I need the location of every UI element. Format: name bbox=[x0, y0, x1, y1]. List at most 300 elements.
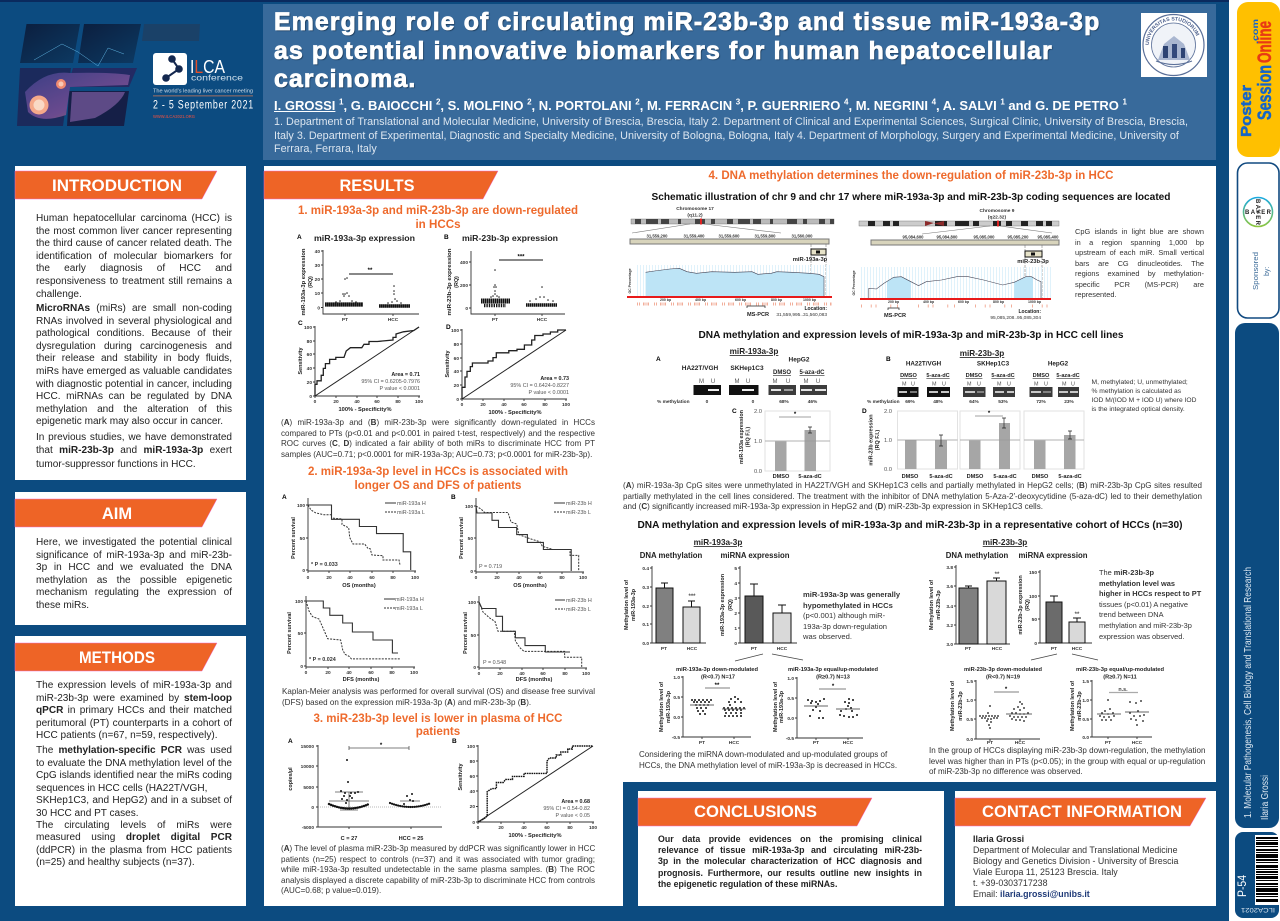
chart: plasma ROC curve: Area = 0.68 bbox=[561, 799, 590, 805]
affiliations bbox=[274, 116, 1188, 155]
chart: miR-193a-3p expression dot plot: 10 bbox=[315, 291, 320, 297]
diagram: chromosome 9 with miR-23b-3p: miR-23b-3p bbox=[1017, 259, 1049, 265]
text: methods paragraph 1: The expression levels of miR-193a-3p and bbox=[36, 680, 232, 691]
text: introduction paragraph 1: the third cause of cancer related death. The bbox=[36, 238, 232, 249]
chart: Kaplan-Meier OS miR-193a bbox=[282, 494, 426, 589]
gels: miR-23b-3p cell lines: 23% bbox=[1064, 399, 1075, 405]
chart: Kaplan-Meier OS miR-23b: Percent survival bbox=[459, 517, 465, 559]
diagram: chromosome 17 with miR-193a-3p: 600 bp bbox=[735, 298, 746, 302]
chart: miR-193a expression in HepG2: C bbox=[732, 408, 737, 415]
chart: miR-23b expression in three cell lines: 1.0 bbox=[884, 438, 892, 444]
chart: Kaplan-Meier OS miR-193a: 0 bbox=[302, 568, 305, 574]
gels: miR-23b-3p cell lines: 72% bbox=[1036, 399, 1047, 405]
text: aim: these miRs. bbox=[36, 600, 89, 611]
gels: miR-23b-3p cell lines: 64% bbox=[969, 399, 980, 405]
chart: plasma ROC curve: 60 bbox=[470, 774, 475, 780]
chart: miR-23b-3p down-modulated scatter: miR-23b-3p down-modulated bbox=[964, 667, 1043, 673]
text: conclusions: the epigenetic regulation of these miRNAs. bbox=[658, 879, 837, 889]
caption: result 2: (DFS) based on the expression miR-193a-3p (A) and miR-23b-3p (B). bbox=[282, 698, 531, 706]
chart: miR-193a-3p expression dot plot: 20 bbox=[315, 277, 320, 283]
caption: result 1 bbox=[281, 418, 595, 458]
heading: result 1: 1. miR-193a-3p and miR-23b-3p are down-regulated bbox=[298, 204, 578, 217]
chart: miR-23b expression in three cell lines: 5-aza-dC bbox=[929, 474, 953, 480]
chart: miR-193a expression in HepG2: miR-193a expression bbox=[739, 410, 745, 464]
text: introduction paragraph 1: challenge. bbox=[36, 289, 82, 300]
diagram: chromosome 17 with miR-193a-3p: Chromosome 17 bbox=[676, 206, 714, 212]
title: as potential innovative biomarkers for human hepatocellular bbox=[274, 38, 1053, 65]
chart: miR-193a-3p DNA methylation bars: DNA methylation bbox=[640, 551, 702, 560]
chart: Kaplan-Meier DFS miR-23b: 40 bbox=[519, 671, 525, 677]
chart: Kaplan-Meier OS miR-193a: OS (months) bbox=[342, 583, 376, 589]
icon: university seal bbox=[1141, 13, 1207, 77]
caption: cell lines: and (C) significantly increased miR-193a-3p expression in HepG2 and (D) miR-23b-3p expression in SKHep1C3 cells. bbox=[623, 502, 1043, 511]
chart: ROC curve miR-23b-3p: 0 bbox=[456, 397, 459, 403]
chart: plasma ROC curve: 20 bbox=[498, 825, 504, 831]
text: aim: mechanism regulating the expression of bbox=[36, 587, 232, 598]
panel: poster number and barcode bbox=[1235, 832, 1279, 918]
chart: ROC curve miR-193a-3p: 0 bbox=[309, 394, 312, 400]
text: introduction paragraph 2: their release and stability in body fluids, bbox=[36, 353, 232, 364]
heading ribbon: conclusions: CONCLUSIONS bbox=[694, 803, 817, 821]
chart: miR-193a-3p miRNA expression bars: miR-193a-3p expression bbox=[720, 574, 726, 636]
text: CpG islands note: regions examined by methylation- bbox=[1075, 269, 1204, 278]
caption: miR-23b-3p cohort: In the group of HCCs displaying miR-23b-3p down-regulation, the methylation bbox=[929, 746, 1205, 755]
sponsor box: Bayer: by: bbox=[1264, 267, 1271, 276]
text: methods paragraph 1: peritumoral (PT) counterparts in a cohort of bbox=[36, 718, 232, 729]
title: Emerging role of circulating miR-23b-3p and tissue miR-193a-3p bbox=[274, 9, 1100, 36]
chart: ROC curve miR-23b-3p: 100 bbox=[562, 402, 570, 408]
text: conclusions: 3p in the molecular characterization of HCC diagnosis and bbox=[658, 856, 922, 866]
chart: ROC curve miR-193a-3p bbox=[298, 320, 423, 413]
chart: Kaplan-Meier DFS miR-23b: 0 bbox=[473, 665, 476, 671]
gels: miR-23b-3p cell lines: U bbox=[1071, 382, 1075, 388]
text: introduction paragraph 3: that miR-23b-3p and miR-193a-3p exert bbox=[36, 445, 232, 456]
text: introduction paragraph 2: HCC. miRNAs can be regulated by DNA bbox=[36, 391, 232, 402]
caption: miR-23b-3p cohort: level was higher than in PTs (p<0.05); in the group with equal or up-regulation bbox=[929, 757, 1205, 766]
caption: miR-193a-3p cohort: HCCs, the DNA methylation level of miR-193a-3p is decreased in HCCs. bbox=[639, 761, 897, 770]
chart: miR-23b-3p miRNA expression bars: 50 bbox=[1032, 617, 1037, 623]
chart: Kaplan-Meier OS miR-193a: miR-193a L bbox=[397, 510, 425, 516]
chart: miR-23b-3p miRNA expression bars bbox=[1018, 551, 1098, 660]
chart: miR-23b-3p miRNA expression bars: 0 bbox=[1034, 641, 1037, 647]
chart: miR-193a-3p DNA methylation bars: 0.1 bbox=[642, 622, 649, 628]
conference logo: ILCA: WWW.ILCA2021.ORG bbox=[153, 114, 195, 119]
gels: miR-193a-3p cell lines: U bbox=[746, 379, 750, 385]
chart: miR-23b-3p DNA methylation bars: 3.6 bbox=[946, 584, 953, 590]
chart: ROC curve miR-23b-3p: Sensitivity bbox=[445, 351, 451, 377]
chart: miR-23b-3p equal/up-modulated scatter: PT bbox=[1105, 740, 1111, 746]
conference logo: ILCA: The world's leading liver cancer meeting bbox=[153, 88, 253, 94]
text: miR-23b-3p note: methylation and miR-23b-3p bbox=[1099, 621, 1192, 630]
panel: results bbox=[264, 166, 623, 906]
chart: ROC curve miR-193a-3p: 60 bbox=[307, 352, 312, 358]
chart: miR-23b-3p equal/up-modulated scatter: 1.0 bbox=[1082, 698, 1089, 704]
panel: poster number and barcode: P-54 bbox=[1235, 875, 1249, 897]
gels: miR-193a-3p cell lines: U bbox=[786, 379, 790, 385]
gels: miR-23b-3p cell lines: M bbox=[967, 382, 972, 388]
chart: miR-193a-3p miRNA expression bars: miRNA expression bbox=[720, 551, 790, 560]
text: introduction paragraph 1: the most common liver cancer representing bbox=[36, 226, 232, 237]
chart: Kaplan-Meier DFS miR-23b: DFS (months) bbox=[516, 677, 552, 683]
heading: result 3 bbox=[314, 712, 563, 738]
text: miR-23b-3p note: The miR-23b-3p bbox=[1099, 568, 1154, 577]
gels: miR-193a-3p cell lines: U bbox=[711, 379, 715, 385]
text: introduction paragraph 2: with diagnostic potential in cancer, including bbox=[36, 379, 232, 390]
chart: miR-193a-3p DNA methylation bars: Methylation level of bbox=[624, 580, 630, 630]
caption: result 1: ROC curves (C, D) indicated a fair ability of both miRs to discriminate HCC from PT bbox=[281, 439, 595, 448]
sponsor box: Bayer: BAYER bbox=[1254, 199, 1260, 226]
text: introduction paragraph 2: RNAs involved in several physiological and bbox=[36, 316, 232, 327]
chart: Kaplan-Meier DFS miR-23b: 100 bbox=[582, 671, 590, 677]
gels: miR-23b-3p cell lines bbox=[867, 349, 1080, 405]
text: introduction paragraph 3 bbox=[36, 432, 232, 470]
chart: Kaplan-Meier DFS miR-193a: 100 bbox=[410, 670, 418, 676]
caption: result 3: patients (n=25) respect to controls (n=37) and it was associated with tumor grading; bbox=[281, 854, 595, 864]
text: miR-23b-3p note: methylation level was bbox=[1099, 579, 1175, 588]
chart: ROC curve miR-193a-3p: 60 bbox=[374, 399, 380, 405]
caption: result 1: (A) miR-193a-3p and (B) miR-23b-3p were significantly down-regulated in HCCs bbox=[281, 418, 595, 427]
gels: miR-193a-3p cell lines: 68% bbox=[779, 399, 790, 405]
chart: Kaplan-Meier DFS miR-193a: * P = 0.024 bbox=[309, 657, 336, 663]
chart: ROC curve miR-23b-3p: Area = 0.73 bbox=[540, 376, 569, 382]
chart: miR-23b-3p equal/up-modulated scatter: miR-23b-3p bbox=[1077, 691, 1083, 721]
chart: Kaplan-Meier OS miR-23b: 50 bbox=[468, 536, 473, 542]
panel: title header bbox=[263, 4, 1216, 160]
heading: result 2: longer OS and DFS of patients bbox=[354, 479, 522, 492]
text: methods paragraph 3: measured using droplet digital PCR bbox=[36, 832, 232, 843]
chart: ROC curve miR-193a-3p: 20 bbox=[307, 380, 312, 386]
text: introduction paragraph 2: dysregulation during carcinogenesis and bbox=[36, 341, 232, 352]
chart: miR-193a-3p miRNA expression bars: 5 bbox=[734, 566, 737, 572]
chart: plasma ROC curve: 100 bbox=[589, 825, 597, 831]
chart: miR-23b-3p expression dot plot: miR-23b-3p expression bbox=[462, 233, 558, 243]
text: contact details: Ilaria Grossi bbox=[973, 834, 1024, 844]
chart: Kaplan-Meier OS miR-23b: 100 bbox=[579, 575, 587, 581]
diagram: chromosome 9 with miR-23b-3p: 95,085,000 bbox=[974, 234, 995, 240]
chart: miR-23b expression in three cell lines bbox=[862, 408, 1084, 480]
chart: ROC curve miR-193a-3p: 20 bbox=[333, 399, 339, 405]
gels: miR-23b-3p cell lines: M bbox=[1034, 382, 1039, 388]
gels: miR-193a-3p cell lines: miR-193a-3p bbox=[730, 347, 778, 356]
text: CpG islands note: bars are CG dinucleotides. The bbox=[1075, 258, 1204, 268]
chart: miR-193a-3p equal/up-modulated scatter: -0.5 bbox=[786, 736, 794, 742]
title bbox=[274, 9, 1100, 93]
chart: Kaplan-Meier DFS miR-193a: miR-193a H bbox=[395, 597, 424, 603]
text: gel legend: M, methylated; U, unmethylated; bbox=[1092, 379, 1188, 386]
subheading: representative cohort: DNA methylation and expression levels of miR-193a-3p and miR-23b-3p in a representative cohort of HCCs (n=30) bbox=[638, 520, 1182, 531]
badge: PosterSessionOnline bbox=[1237, 2, 1280, 157]
text: methods paragraph 2: sequences in HCC cells (HA22T/VGH, bbox=[36, 783, 207, 794]
gels: miR-193a-3p cell lines: SKHep1C3 bbox=[730, 365, 764, 372]
text: miR-193a-3p note: miR-193a-3p was generally bbox=[803, 590, 900, 599]
caption: result 3: (AUC=0.68; p value=0.019). bbox=[281, 886, 381, 895]
gels: miR-23b-3p cell lines: U bbox=[942, 382, 946, 388]
chart: miR-193a expression in HepG2: DMSO bbox=[773, 474, 790, 480]
chart: Kaplan-Meier OS miR-23b: miR-23b H bbox=[566, 501, 592, 507]
diagram: chromosome 9 with miR-23b-3p: 95,084,800 bbox=[937, 234, 958, 240]
affiliations: Ferrara, Ferrara, Italy bbox=[274, 143, 377, 155]
chart: miR-23b-3p miRNA expression bars: miRNA expression bbox=[1018, 551, 1088, 560]
text: miR-23b-3p note: expression was observed. bbox=[1099, 632, 1184, 641]
gels: miR-23b-3p cell lines: M bbox=[902, 382, 907, 388]
gels: miR-193a-3p cell lines: M bbox=[699, 379, 704, 385]
chart: miR-23b-3p equal/up-modulated scatter: 0.5 bbox=[1082, 717, 1089, 723]
diagram: chromosome 17 with miR-193a-3p: 31,559,200 bbox=[647, 234, 668, 238]
chart: miR-193a expression in HepG2: 2.0 bbox=[754, 409, 762, 415]
caption: result 3 bbox=[281, 844, 595, 895]
chart: Kaplan-Meier OS miR-193a: * P = 0.033 bbox=[311, 562, 338, 568]
chart: miR-23b-3p miRNA expression bars: HCC bbox=[1072, 646, 1083, 652]
heading: result 2 bbox=[308, 465, 568, 492]
text: conclusions: prognosis. Furthermore, our results outline new insights in bbox=[658, 868, 922, 878]
chart: Kaplan-Meier OS miR-23b: 0 bbox=[475, 575, 478, 581]
chart: miR-23b-3p DNA methylation bars: HCC bbox=[992, 646, 1003, 652]
diagram: chromosome 17 with miR-193a-3p: 31,559,995..31,560,083 bbox=[776, 312, 827, 318]
chart: Kaplan-Meier OS miR-23b: 60 bbox=[537, 575, 543, 581]
chart: miR-193a-3p DNA methylation bars: *** bbox=[688, 594, 696, 600]
chart: plasma ROC curve: 40 bbox=[470, 789, 475, 795]
chart: Kaplan-Meier OS miR-23b: 80 bbox=[559, 575, 565, 581]
chart: miR-193a-3p equal/up-modulated scatter: PT bbox=[813, 740, 819, 746]
text: introduction paragraph 1: responsiveness to treatment still remains a bbox=[36, 276, 232, 287]
text: introduction paragraph 1: identification of molecular biomarkers for bbox=[36, 251, 232, 262]
text: contact details: t. +39-0303717238 bbox=[973, 878, 1048, 888]
panel: topic and presenter: Ilaria Grossi bbox=[1259, 775, 1271, 820]
chart: miR-23b expression in three cell lines: D bbox=[862, 408, 867, 415]
diagram: chromosome 17 with miR-193a-3p: 31,559,800 bbox=[755, 234, 776, 238]
chart: plasma ROC curve: 80 bbox=[567, 825, 573, 831]
chart: miR-193a-3p miRNA expression bars: 0 bbox=[734, 641, 737, 647]
chart: plasma miR-23b-3p copies dot plot: 5000 bbox=[303, 785, 314, 791]
chart: Kaplan-Meier DFS miR-23b: 20 bbox=[497, 671, 503, 677]
diagram: chromosome 17 with miR-193a-3p: (q11.2) bbox=[687, 212, 703, 218]
chart: ROC curve miR-23b-3p: 40 bbox=[501, 402, 507, 408]
chart: Kaplan-Meier DFS miR-23b: miR-23b H bbox=[566, 598, 592, 604]
chart: miR-23b expression in three cell lines: 0.0 bbox=[884, 467, 892, 473]
caption: miR-23b-3p cohort bbox=[929, 746, 1205, 776]
chart: Kaplan-Meier DFS miR-193a bbox=[287, 596, 424, 683]
chart: miR-193a-3p DNA methylation bars: HCC bbox=[687, 646, 698, 652]
chart: miR-23b-3p down-modulated scatter: miR-23b-3p bbox=[958, 691, 964, 721]
diagram: chromosome 17 with miR-193a-3p: miR-193a-3p bbox=[793, 257, 828, 263]
chart: Kaplan-Meier OS miR-193a: 20 bbox=[326, 575, 332, 581]
chart: miR-23b-3p down-modulated scatter bbox=[950, 667, 1043, 746]
diagram: chromosome 17 with miR-193a-3p: 1000 bp bbox=[803, 298, 816, 302]
chart: miR-193a-3p expression dot plot: 30 bbox=[315, 263, 320, 269]
conference logo: ILCA: 2 - 5 September 2021 bbox=[153, 100, 254, 112]
caption: result 1: samples (AUC=0.71; p<0.0001 for miR-193a-3p; AUC=0.73; p<0.0001 for miR-23b-3p). bbox=[281, 450, 592, 458]
text: conclusions: Our data provide evidences on the promising clinical bbox=[658, 834, 922, 844]
diagram: chromosome 17 with miR-193a-3p: 31,560,000 bbox=[792, 234, 813, 238]
diagram: chromosome 9 with miR-23b-3p: Chromosome 9 bbox=[980, 208, 1015, 214]
chart: plasma miR-23b-3p copies dot plot: * bbox=[380, 743, 383, 749]
chart: Kaplan-Meier DFS miR-23b: 100 bbox=[468, 600, 476, 606]
text: introduction paragraph 1: Human hepatocellular carcinoma (HCC) is bbox=[36, 213, 232, 224]
chart: miR-23b-3p down-modulated scatter: 1.5 bbox=[966, 679, 973, 685]
chart: miR-193a expression in HepG2: 0.0 bbox=[754, 469, 762, 475]
chart: miR-23b-3p expression dot plot: 200 bbox=[460, 283, 468, 289]
heading: section 4: 4. DNA methylation determines the down-regulation of miR-23b-3p in HCC bbox=[708, 169, 1114, 182]
chart: Kaplan-Meier OS miR-193a: 80 bbox=[390, 575, 396, 581]
chart: Kaplan-Meier OS miR-23b: 0 bbox=[470, 569, 473, 575]
chart: Kaplan-Meier OS miR-23b: miR-23b L bbox=[566, 510, 591, 516]
chart: Kaplan-Meier OS miR-23b: B bbox=[451, 494, 456, 501]
panel: conclusions bbox=[638, 791, 944, 906]
chart: plasma miR-23b-3p copies dot plot: 10000 bbox=[301, 764, 314, 770]
chart: miR-193a-3p expression dot plot: PT bbox=[342, 317, 348, 323]
diagram: chromosome 9 with miR-23b-3p: 95,084,600 bbox=[903, 234, 924, 240]
diagram: chromosome 17 with miR-193a-3p: 400 bp bbox=[695, 298, 706, 302]
chart: miR-193a expression in HepG2: 1.0 bbox=[754, 439, 762, 445]
chart: ROC curve miR-23b-3p: 100 bbox=[451, 328, 459, 334]
affiliations: 1. Department of Translational and Molecular Medicine, University of Brescia, Brescia, Italy 2. Department of Clinical and Experimental Sciences, Surgical Clinic, University of Brescia, Brescia, bbox=[274, 116, 1188, 128]
chart: plasma ROC curve: 100% - Specificity% bbox=[508, 833, 562, 839]
heading ribbon: methods: METHODS bbox=[79, 649, 155, 667]
text: methods paragraph 2: to evaluate the DNA methylation level of the bbox=[36, 758, 232, 769]
chart: Kaplan-Meier DFS miR-23b: 0 bbox=[478, 671, 481, 677]
sponsor box: Bayer: BAYER bbox=[1245, 210, 1272, 216]
title: carcinoma. bbox=[274, 66, 416, 93]
gels: miR-193a-3p cell lines: U bbox=[816, 379, 820, 385]
text: methods paragraph 3: (ddPCR) in the plasma from HCC patients bbox=[36, 845, 232, 856]
text: methods paragraph 1: qPCR in primary HCCs and their matched bbox=[36, 705, 232, 716]
diagram: chromosome 9 with miR-23b-3p bbox=[852, 208, 1059, 321]
text: contact details bbox=[973, 834, 1178, 899]
chart: miR-193a-3p expression dot plot: miR-193a-3p expression bbox=[301, 248, 307, 316]
chart: miR-193a-3p miRNA expression bars bbox=[720, 551, 803, 661]
chart: miR-193a-3p miRNA expression bars: PT bbox=[751, 646, 757, 652]
badge: PosterSessionOnline: .com bbox=[1251, 19, 1260, 44]
chart: Kaplan-Meier OS miR-193a: 50 bbox=[300, 536, 305, 542]
chart: ROC curve miR-193a-3p: 95% CI = 0.6205-0.7976 bbox=[361, 379, 420, 385]
chart: ROC curve miR-193a-3p: C bbox=[298, 320, 303, 327]
chart: ROC curve miR-193a-3p: 0 bbox=[314, 399, 317, 405]
chart: Kaplan-Meier OS miR-193a: 40 bbox=[347, 575, 353, 581]
chart: Kaplan-Meier DFS miR-193a: DFS (months) bbox=[343, 677, 379, 683]
gels: miR-23b-3p cell lines: M bbox=[997, 382, 1002, 388]
text: gel legend: IOD M/(IOD M + IOD U) where IOD bbox=[1092, 397, 1196, 404]
heading: result 3: 3. miR-23b-3p level is lower in plasma of HCC bbox=[314, 712, 563, 725]
text: methods paragraph 2: The methylation-specific PCR was used bbox=[36, 745, 232, 756]
gels: miR-23b-3p cell lines: B bbox=[886, 356, 891, 363]
gels: miR-23b-3p cell lines: U bbox=[1007, 382, 1011, 388]
chart: miR-23b-3p equal/up-modulated scatter bbox=[1070, 667, 1165, 746]
chart: miR-23b-3p expression dot plot: PT bbox=[492, 317, 498, 323]
chart: plasma ROC curve: 95% CI = 0.54-0.82 bbox=[543, 806, 590, 812]
text: contact details: Department of Molecular and Translational Medicine bbox=[973, 844, 1178, 854]
chart: miR-23b-3p DNA methylation bars: 3.8 bbox=[946, 565, 953, 571]
heading ribbon: results bbox=[264, 171, 498, 199]
diagram: chromosome 9 with miR-23b-3p: 800 bp bbox=[993, 300, 1004, 304]
chart: miR-23b-3p DNA methylation bars: DNA methylation bbox=[946, 551, 1008, 560]
gels: miR-23b-3p cell lines: M bbox=[932, 382, 937, 388]
text: methods paragraph 2: SKHep1C3, and HepG2) and in a subset of bbox=[36, 795, 232, 806]
chart: miR-193a-3p equal/up-modulated scatter: miR-193a-3p equal/up-modulated bbox=[788, 667, 879, 673]
text: miR-193a-3p note: 193a-3p down-regulation bbox=[803, 622, 887, 630]
text: methods paragraph 2: CpG islands identified near the miRs coding bbox=[36, 770, 232, 781]
chart: miR-193a-3p expression dot plot: 0 bbox=[317, 306, 320, 312]
chart: plasma ROC curve: 20 bbox=[470, 804, 475, 810]
chart: miR-23b-3p equal/up-modulated scatter: HCC bbox=[1132, 740, 1143, 746]
chart: miR-193a-3p DNA methylation bars: 0.4 bbox=[642, 566, 649, 572]
chart: miR-193a-3p DNA methylation bars: 0.0 bbox=[642, 641, 649, 647]
chart: ROC curve miR-23b-3p bbox=[445, 324, 570, 416]
panel: contact information bbox=[955, 791, 1216, 906]
text: methods paragraph 3: The circulating levels of miRs were bbox=[36, 820, 232, 831]
chart: miR-23b-3p down-modulated scatter: 0.5 bbox=[966, 717, 973, 723]
chart: miR-23b-3p down-modulated scatter: 0.0 bbox=[966, 737, 973, 743]
chart: Kaplan-Meier DFS miR-23b: 50 bbox=[471, 633, 476, 639]
chart: Kaplan-Meier OS miR-193a: 0 bbox=[307, 575, 310, 581]
chart: miR-23b-3p equal/up-modulated scatter: miR-23b-3p equal/up-modulated bbox=[1076, 667, 1165, 673]
chart: Kaplan-Meier OS miR-193a: 100 bbox=[297, 503, 305, 509]
text: gel legend: % methylation is calculated as bbox=[1092, 388, 1181, 395]
heading ribbon: introduction: INTRODUCTION bbox=[52, 177, 182, 195]
chart: miR-23b-3p down-modulated scatter: 1.0 bbox=[966, 698, 973, 704]
gels: miR-23b-3p cell lines: 5-aza-dC bbox=[926, 373, 950, 379]
gels: miR-193a-3p cell lines: 46% bbox=[808, 399, 818, 405]
gels: miR-193a-3p cell lines: M bbox=[804, 379, 808, 385]
gels: miR-193a-3p cell lines: % methylation bbox=[657, 399, 690, 405]
chart: miR-23b-3p equal/up-modulated scatter: (R≥0.7) N=11 bbox=[1103, 674, 1137, 680]
chart: plasma ROC curve: 0 bbox=[477, 825, 480, 831]
text: miR-193a-3p note: hypomethylated in HCCs bbox=[803, 600, 893, 610]
text: aim: methylation as the possible epigenetic bbox=[36, 575, 232, 586]
gels: miR-193a-3p cell lines bbox=[656, 347, 827, 405]
sponsor box: Bayer bbox=[1238, 163, 1279, 318]
chart: miR-23b-3p miRNA expression bars: PT bbox=[1051, 646, 1057, 652]
chart: miR-193a-3p down-modulated scatter: 0.0 bbox=[673, 715, 680, 721]
sponsor box: Bayer: Sponsored bbox=[1253, 252, 1260, 290]
gels: miR-23b-3p cell lines: SKHep1C3 bbox=[977, 360, 1010, 368]
chart: Kaplan-Meier DFS miR-193a: 100 bbox=[295, 599, 303, 605]
chart: Kaplan-Meier OS miR-193a: 60 bbox=[369, 575, 375, 581]
chart: miR-23b-3p DNA methylation bars: miR-23b-3p bbox=[983, 538, 1027, 547]
chart: miR-23b-3p DNA methylation bars: ** bbox=[995, 572, 1000, 578]
diagram: chromosome 17 with miR-193a-3p: MS-PCR bbox=[747, 312, 769, 318]
text: introduction paragraph 2: miRs have emerged as valuable candidates bbox=[36, 366, 232, 377]
subheading: cell lines: DNA methylation and expression levels of miR-193a-3p and miR-23b-3p in HCC cell lines bbox=[698, 330, 1124, 341]
chart: Kaplan-Meier OS miR-23b: 20 bbox=[494, 575, 500, 581]
gels: miR-23b-3p cell lines: HepG2 bbox=[1048, 360, 1069, 368]
heading: result 3: patients bbox=[416, 725, 460, 738]
gels: miR-193a-3p cell lines: DMSO bbox=[773, 370, 791, 376]
diagram: chromosome 9 with miR-23b-3p: 95,085,208..95,085,304 bbox=[990, 315, 1041, 321]
heading ribbon: introduction bbox=[15, 171, 217, 199]
text: miR-23b-3p note: higher in HCCs respect to PT bbox=[1099, 589, 1201, 598]
gels: miR-193a-3p cell lines: HA22T/VGH bbox=[682, 365, 719, 372]
chart: Kaplan-Meier OS miR-23b: 100 bbox=[465, 504, 473, 510]
chart: miR-23b-3p equal/up-modulated scatter: n.s. bbox=[1118, 687, 1128, 693]
chart: miR-23b expression in three cell lines: 5-aza-dC bbox=[1058, 474, 1082, 480]
chart: Kaplan-Meier OS miR-193a: Percent survival bbox=[291, 517, 297, 559]
diagram: chromosome 9 with miR-23b-3p: 600 bp bbox=[958, 300, 969, 304]
chart: miR-193a-3p expression dot plot: (RQ) bbox=[308, 276, 314, 288]
chart: miR-23b-3p down-modulated scatter: * bbox=[1005, 687, 1008, 693]
chart: miR-193a-3p expression dot plot: miR-193a-3p expression bbox=[314, 233, 415, 243]
chart: Kaplan-Meier DFS miR-193a: 0 bbox=[300, 664, 303, 670]
chart: ROC curve miR-23b-3p: 20 bbox=[454, 383, 459, 389]
chart: miR-23b-3p miRNA expression bars: 100 bbox=[1029, 594, 1037, 600]
gels: miR-193a-3p cell lines: 0 bbox=[752, 399, 755, 405]
panel: topic and presenter: 1. Molecular Pathogenesis, Cell Biology and Translational Research bbox=[1242, 567, 1254, 818]
chart: miR-23b expression in three cell lines: DMSO bbox=[902, 474, 919, 480]
text: methods paragraph 1: HCC patients (n=67, n=59, respectively). bbox=[36, 730, 218, 741]
gels: miR-23b-3p cell lines: 5-aza-dC bbox=[1056, 373, 1080, 379]
text: CpG islands note: represented. bbox=[1075, 290, 1116, 299]
chart: miR-193a-3p expression dot plot: 40 bbox=[315, 249, 320, 255]
chart: miR-23b expression in three cell lines: * bbox=[988, 411, 991, 417]
